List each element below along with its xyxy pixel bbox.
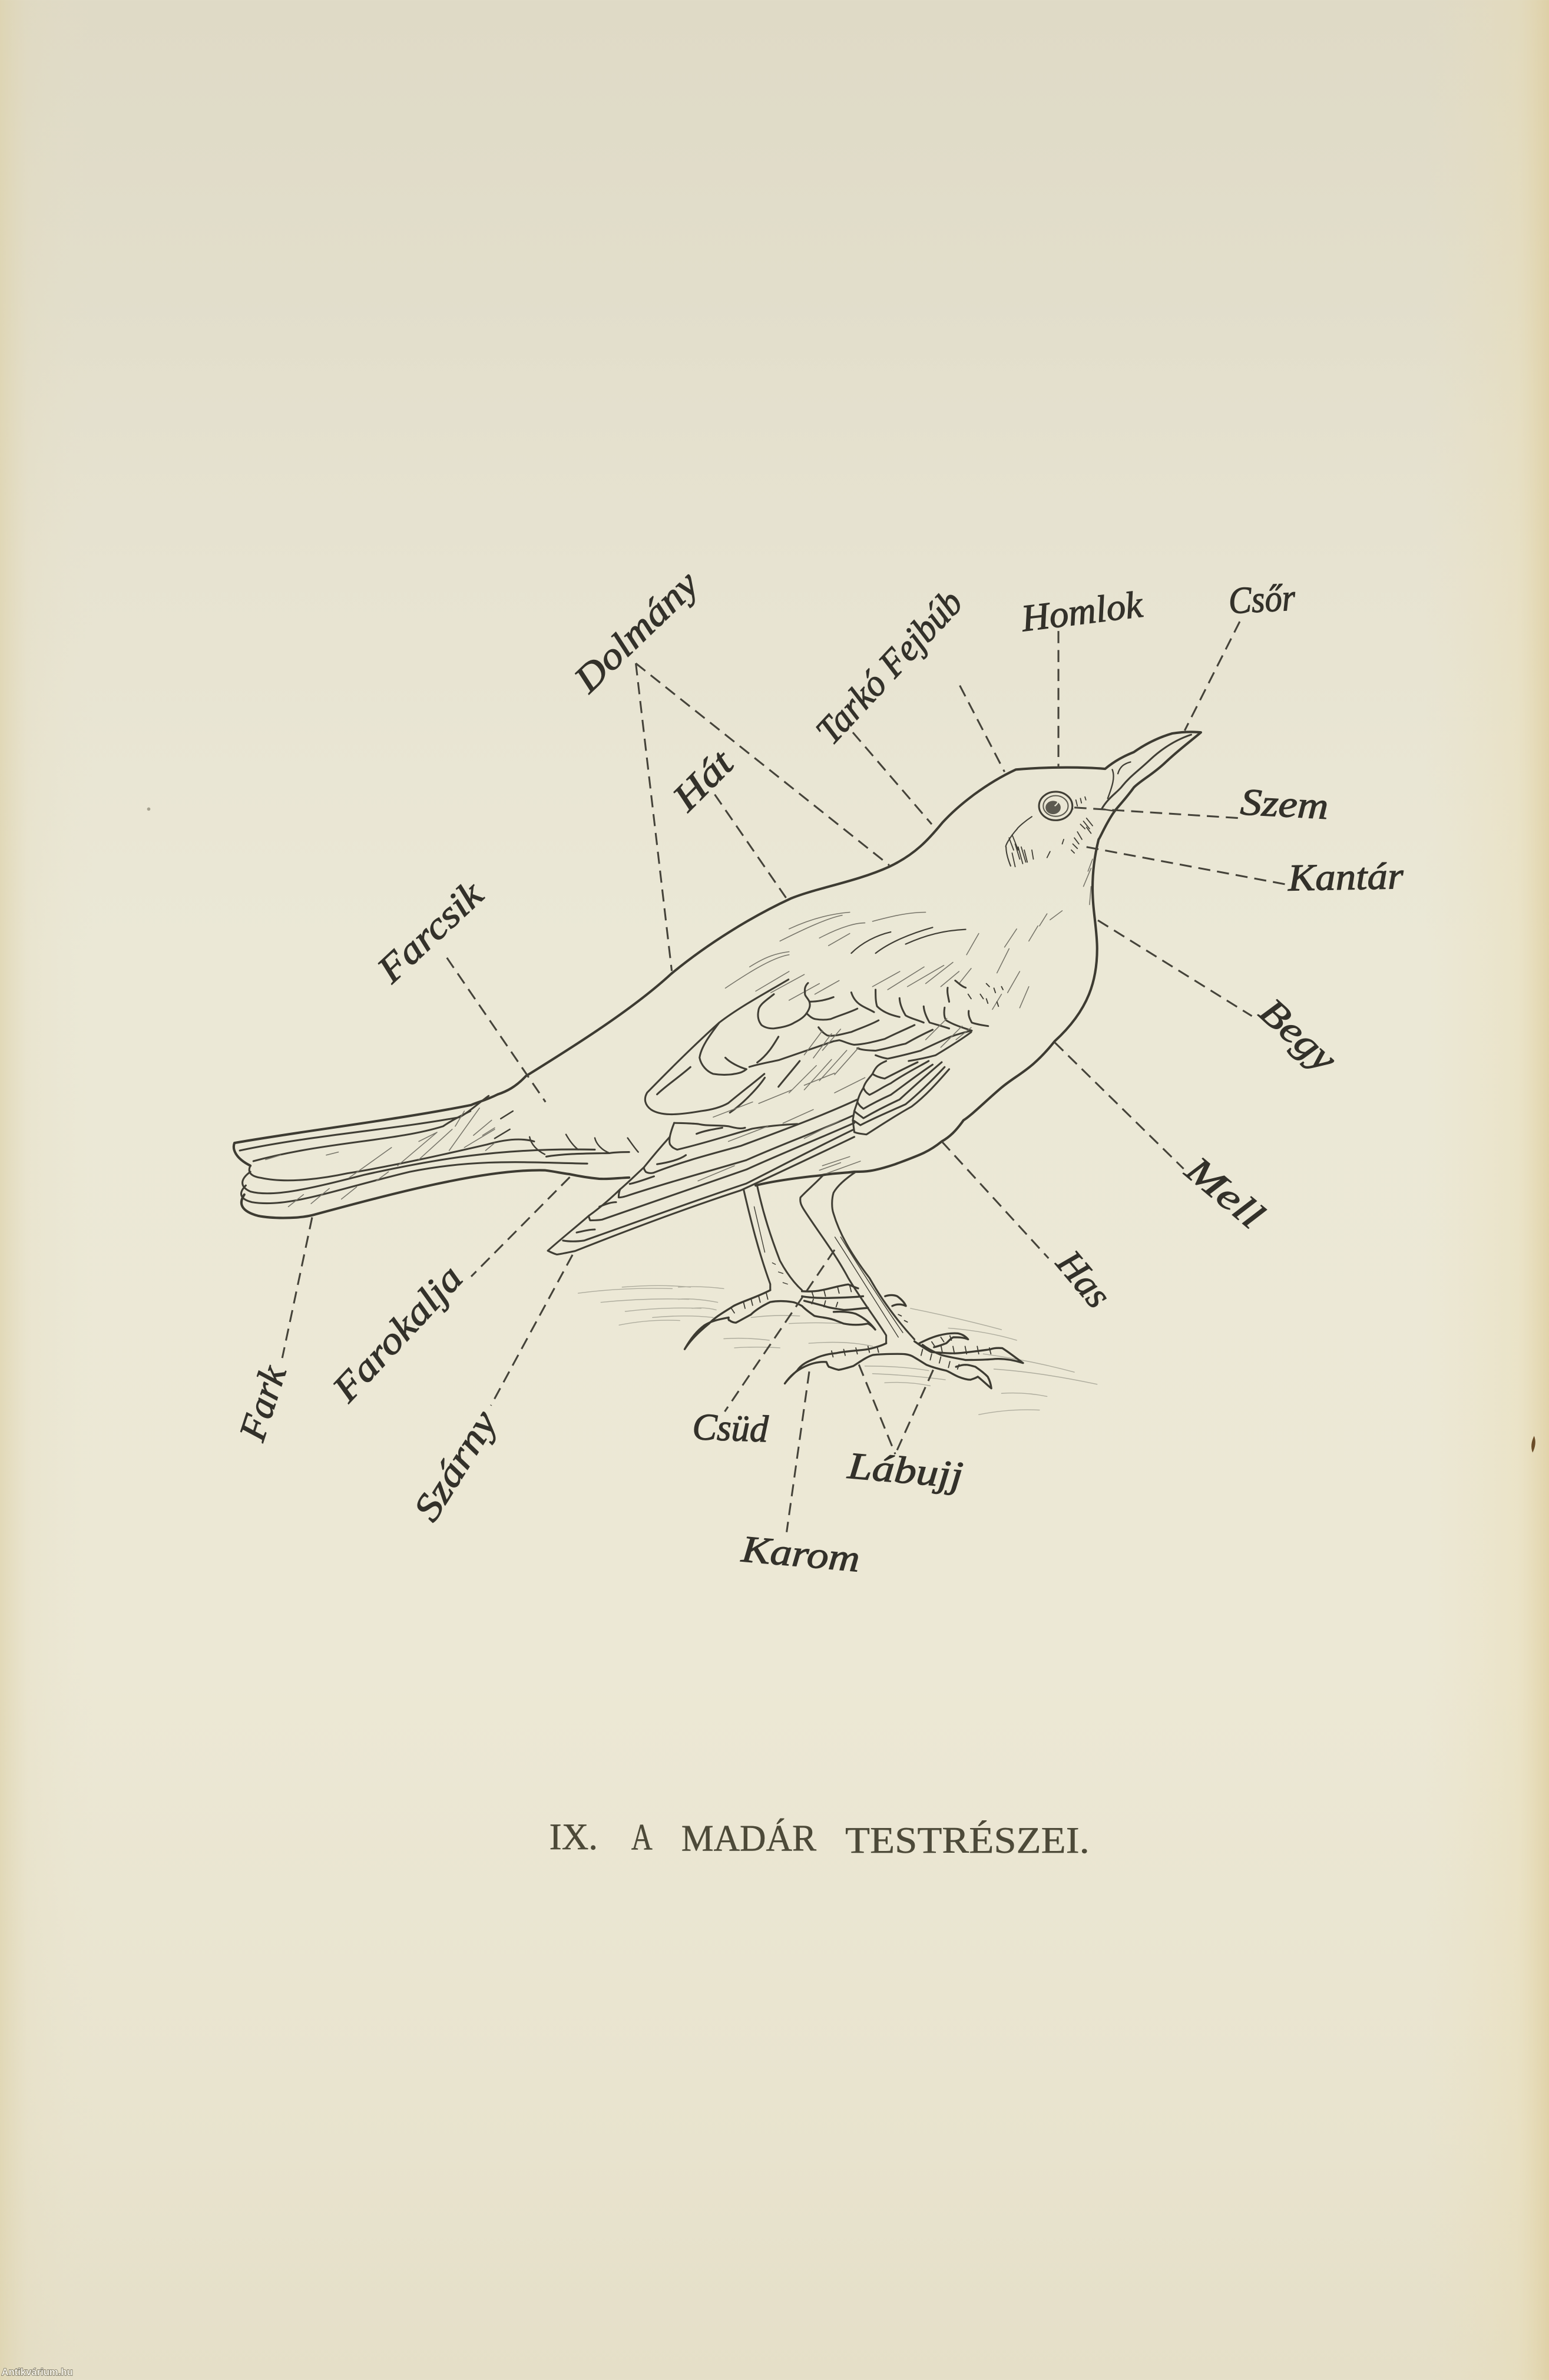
ground hatching — [578, 1285, 1097, 1414]
callout: Farokalja — [324, 1177, 570, 1410]
label: Fark: Fark — [231, 1360, 294, 1446]
callout: Csüd — [691, 1250, 835, 1450]
eye — [1039, 792, 1073, 820]
callout: Karom — [739, 1371, 862, 1580]
leader line: Szem — [1074, 808, 1240, 818]
tail and rump hatching — [266, 1108, 495, 1206]
leader lines: Tarkó, Fejbúb — [853, 686, 1005, 824]
wing hatching — [698, 1019, 971, 1181]
callout: Mell — [1055, 1042, 1272, 1237]
wing coverts — [645, 980, 1003, 1115]
caption title: IX. — [550, 1816, 598, 1857]
callout: Csőr — [1184, 576, 1297, 730]
label: Tarkó Fejbúb: Tarkó Fejbúb — [807, 581, 971, 752]
caption title: A — [631, 1816, 653, 1858]
leader line: Homlok — [1058, 631, 1059, 768]
leader line: Fark — [282, 1217, 312, 1358]
callout: Hát — [664, 741, 786, 898]
label: Kantár: Kantár — [1287, 855, 1404, 899]
label: Homlok: Homlok — [1018, 583, 1146, 640]
label: Has: Has — [1048, 1242, 1120, 1315]
beak — [1101, 732, 1201, 811]
callout: Fark — [231, 1217, 312, 1446]
label: Farokalja: Farokalja — [324, 1257, 471, 1410]
callout: Tarkó, Fejbúb — [807, 581, 1005, 824]
wing primaries — [548, 1061, 949, 1254]
callout: Lábujj — [846, 1364, 965, 1496]
leader lines: Dolmány — [636, 663, 889, 971]
callout: Has — [942, 1142, 1120, 1315]
leader line: Csüd — [724, 1250, 835, 1412]
callout: Dolmány — [565, 563, 889, 971]
back shading hatches — [726, 911, 1062, 1009]
leader line: Csőr — [1184, 622, 1240, 730]
leader line: Farcsik — [447, 958, 545, 1102]
label: Szem: Szem — [1239, 781, 1329, 827]
leader lines: Lábujj — [859, 1364, 933, 1454]
leader line: Karom — [787, 1371, 809, 1532]
label: Szárny: Szárny — [405, 1403, 505, 1528]
watermark: Antikvárium.hu — [2, 2367, 73, 2378]
callout: Szárny — [405, 1255, 572, 1528]
label: Csüd: Csüd — [691, 1406, 769, 1450]
caption title: TESTRÉSZEI. — [845, 1819, 1090, 1861]
leader line: Kantár — [1087, 847, 1287, 885]
leader line: Has — [942, 1142, 1048, 1258]
callout: Farcsik — [369, 872, 545, 1102]
leader line: Mell — [1055, 1042, 1184, 1169]
leader line: Farokalja — [471, 1177, 570, 1277]
caption title — [550, 1816, 1090, 1861]
face hatching — [1006, 797, 1093, 905]
callout: Kantár — [1087, 847, 1404, 899]
callout: Szem — [1074, 781, 1329, 827]
label: Mell: Mell — [1177, 1148, 1272, 1237]
front foot — [785, 1314, 1023, 1389]
caption title: MADÁR — [681, 1817, 817, 1859]
legs — [743, 1172, 915, 1343]
label: Csőr: Csőr — [1227, 576, 1297, 622]
label: Karom: Karom — [739, 1528, 862, 1580]
back foot — [684, 1284, 906, 1349]
label: Begy: Begy — [1252, 990, 1345, 1080]
label: Dolmány: Dolmány — [565, 563, 707, 700]
bird illustration — [234, 732, 1201, 1414]
label: Lábujj: Lábujj — [846, 1444, 965, 1496]
tail — [234, 1095, 629, 1218]
body outline — [498, 768, 1105, 1095]
leader line: Szárny — [491, 1255, 572, 1406]
callout: Begy — [1098, 920, 1345, 1080]
leader line: Begy — [1098, 920, 1252, 1016]
leader line: Hát — [714, 795, 786, 898]
label: Farcsik: Farcsik — [369, 872, 491, 991]
label: Hát: Hát — [664, 741, 742, 819]
